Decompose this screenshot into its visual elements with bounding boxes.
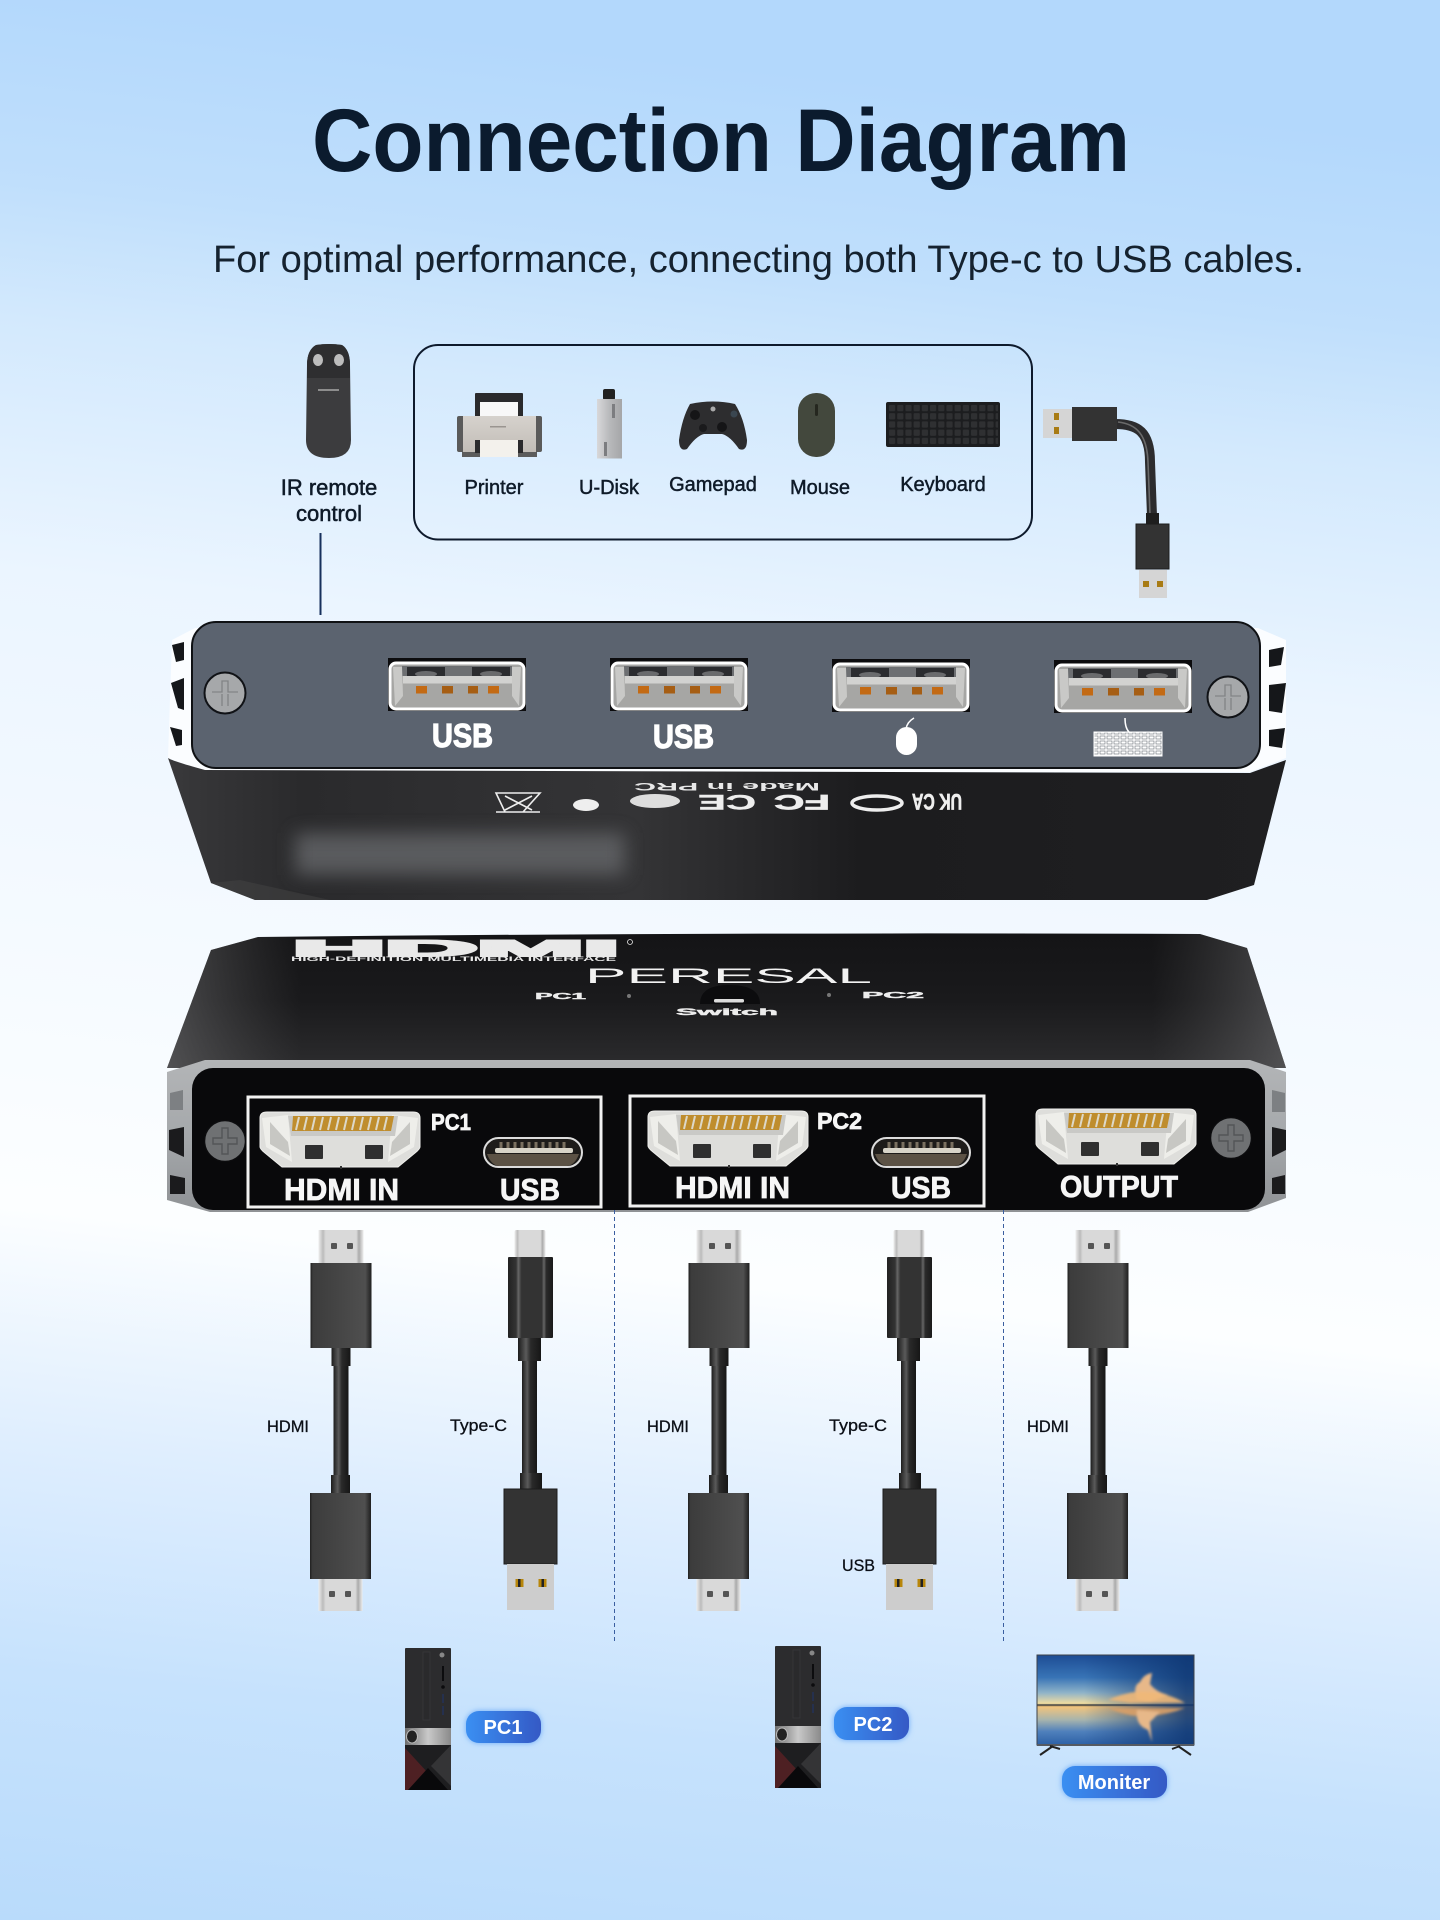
icon: monitor [1037, 1655, 1194, 1755]
label PC1 indicator [535, 991, 631, 1001]
HDMI logo [291, 936, 632, 963]
label: HDMI 1: HDMI [267, 1417, 309, 1436]
box: PC1 ports [248, 1097, 601, 1207]
USB port 4 [1054, 660, 1192, 713]
icon: PC2 tower [775, 1646, 821, 1788]
HDMI logo: HDMI [293, 936, 619, 961]
cable: HDMI PC1 [310, 1230, 372, 1611]
switch button: Switch [676, 1007, 778, 1017]
HDMI port PC2 [648, 1111, 808, 1168]
port label USB 2: USB [653, 718, 714, 755]
label: USB: USB [842, 1556, 875, 1575]
port labels: PC2 [817, 1108, 862, 1134]
screw left [204, 672, 246, 714]
icon: USB cable to hub [1043, 407, 1169, 598]
cable: Type-C PC1 [504, 1230, 557, 1610]
underside body: Made in PRC [634, 780, 820, 792]
USB port 1 [388, 658, 526, 711]
cable: Type-C PC2 [883, 1230, 936, 1610]
icon: mouse [798, 393, 835, 457]
box: PC2 ports [630, 1096, 984, 1206]
label: Mouse: Mouse [790, 477, 850, 499]
port labels: USB [500, 1172, 560, 1207]
icon: u-disk [597, 389, 622, 458]
USB-C port PC2 [872, 1138, 970, 1167]
label: IR remote control [281, 475, 377, 526]
brand PERESAL: PERESAL [585, 965, 872, 988]
USB-C port PC1 [484, 1138, 582, 1167]
badge: PC1 [466, 1711, 541, 1743]
cable: HDMI PC2 [688, 1230, 750, 1611]
icon: PC1 tower [405, 1648, 451, 1790]
screw right [1208, 676, 1248, 718]
title: Connection Diagram [312, 90, 1130, 190]
screw left [204, 1120, 246, 1162]
port labels: USB [891, 1170, 951, 1205]
badge: Moniter [1062, 1766, 1167, 1798]
label PC1 indicator: PC1 [535, 991, 587, 1001]
icon: keyboard [886, 402, 1000, 447]
label: Gamepad: Gamepad [669, 474, 757, 496]
label: Keyboard: Keyboard [900, 474, 986, 496]
port labels: HDMI IN [675, 1170, 790, 1205]
cable: HDMI output [1067, 1230, 1128, 1611]
port labels: PC1 [431, 1109, 471, 1135]
port label USB 1: USB [432, 717, 493, 754]
label: HDMI 3: HDMI [1027, 1417, 1069, 1436]
HDMI logo: HIGH-DEFINITION MULTIMEDIA INTERFACE [291, 956, 618, 963]
connector line from remote to device [320, 533, 322, 615]
badge: Moniter: Moniter [1078, 1772, 1150, 1794]
dashed divider left [614, 1210, 616, 1644]
badge: PC1: PC1 [484, 1717, 522, 1739]
HDMI port output [1036, 1109, 1196, 1166]
screw right [1210, 1118, 1252, 1158]
front panel [192, 1068, 1265, 1210]
icon: keyboard port [1094, 718, 1162, 756]
device: USB side of switch [168, 622, 1286, 900]
USB port 3 [832, 659, 970, 712]
label: IR remote control: IR remote [281, 475, 377, 500]
label: Type-C 2: Type-C [829, 1416, 887, 1435]
underside body: UK CA [912, 789, 962, 814]
side fins [168, 628, 1286, 772]
underside body: CE [698, 790, 756, 813]
port labels: HDMI IN [284, 1172, 399, 1207]
top body [167, 933, 1286, 1068]
underside body: FC [774, 790, 830, 813]
side fins [167, 1060, 1286, 1212]
icon: mouse port [896, 718, 917, 755]
badge: PC2 [834, 1707, 909, 1740]
USB port 2 [610, 658, 748, 711]
label PC2 indicator [827, 990, 925, 1000]
port labels [284, 1108, 1178, 1207]
front panel [192, 622, 1260, 768]
device: HDMI side of switch [167, 933, 1286, 1212]
dashed divider right [1002, 1210, 1004, 1644]
switch button [676, 985, 778, 1017]
badge: PC2: PC2 [854, 1714, 892, 1736]
label: Type-C 1: Type-C [450, 1416, 507, 1435]
icon: gamepad [679, 402, 747, 450]
label PC2 indicator: PC2 [862, 990, 925, 1000]
underside body [168, 758, 1286, 900]
icon: printer [457, 393, 542, 457]
icon: IR remote control [306, 344, 351, 458]
label: Printer: Printer [465, 477, 524, 499]
label: U-Disk: U-Disk [579, 477, 640, 499]
label: IR remote control: control [296, 501, 362, 526]
panel: USB peripherals [414, 345, 1032, 540]
HDMI port PC1 [260, 1112, 420, 1169]
port labels: OUTPUT [1060, 1169, 1178, 1204]
label: HDMI 2: HDMI [647, 1417, 689, 1436]
subtitle: For optimal performance, connecting both Type-c to USB cables. [213, 239, 1304, 281]
